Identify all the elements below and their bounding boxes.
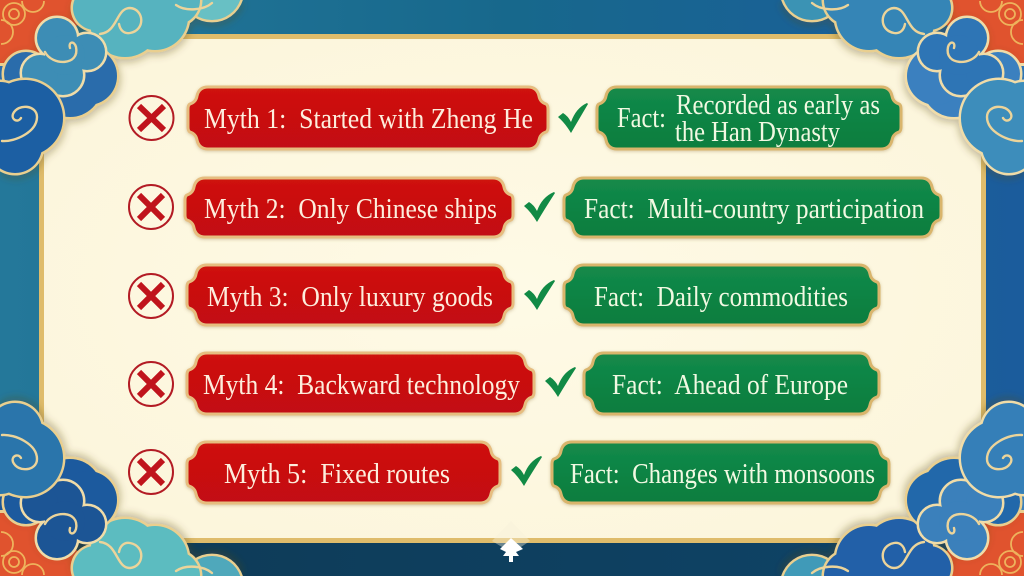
- fact 3 pill: Fact: Daily commodities: [594, 282, 848, 313]
- bottom ornament: [492, 521, 530, 562]
- fact 4 pill: Fact: Ahead of Europe: [612, 370, 848, 401]
- corner clouds: top right: [781, 0, 1024, 176]
- row 2: myth and fact: [129, 178, 941, 237]
- myth 3 pill: Myth 3: Only luxury goods: [207, 282, 493, 313]
- fact 5 pill: [552, 442, 889, 503]
- myth 4 pill: Myth 4: Backward technology: [203, 370, 520, 401]
- icon: green check 4: [545, 367, 576, 397]
- corner clouds: bottom left: [0, 400, 243, 576]
- fact 1 pill: [597, 87, 901, 149]
- row 5: myth and fact: [129, 442, 889, 503]
- icon: red cross 5: [129, 450, 173, 494]
- icon: green check 2: [524, 192, 555, 222]
- icon: red cross 2: [129, 185, 173, 229]
- fact 2 pill: Fact: Multi-country participation: [584, 194, 924, 225]
- fact 2 pill: [564, 178, 941, 237]
- row 3: myth and fact: [129, 265, 879, 325]
- icon: red cross 4: [129, 362, 173, 406]
- corner clouds: bottom right: [781, 400, 1024, 576]
- myth 5 pill: [187, 442, 500, 503]
- myth 2 pill: [185, 178, 513, 237]
- myth 4 pill: [187, 353, 534, 414]
- icon: green check 3: [524, 280, 555, 310]
- row 1: myth and fact: [130, 87, 901, 149]
- fact 4 pill: [584, 353, 879, 414]
- myth 3 pill: [187, 265, 513, 325]
- fact 5 pill: Fact: Changes with monsoons: [570, 459, 875, 490]
- fact 1 pill: Recorded as early as: [676, 90, 880, 121]
- corner clouds: top left: [0, 0, 243, 176]
- fact 1 pill: the Han Dynasty: [675, 117, 840, 148]
- fact 1 pill: Fact:: [617, 103, 666, 134]
- icon: red cross 3: [129, 274, 173, 318]
- icon: green check 5: [511, 456, 542, 486]
- myth 1 pill: Myth 1: Started with Zheng He: [204, 104, 533, 135]
- myth 2 pill: Myth 2: Only Chinese ships: [204, 194, 497, 225]
- myth 5 pill: Myth 5: Fixed routes: [224, 459, 450, 490]
- fact 3 pill: [564, 265, 879, 325]
- icon: red cross 1: [130, 96, 174, 140]
- row 4: myth and fact: [129, 353, 879, 414]
- myth 1 pill: [188, 87, 548, 149]
- icon: green check 1: [558, 103, 588, 133]
